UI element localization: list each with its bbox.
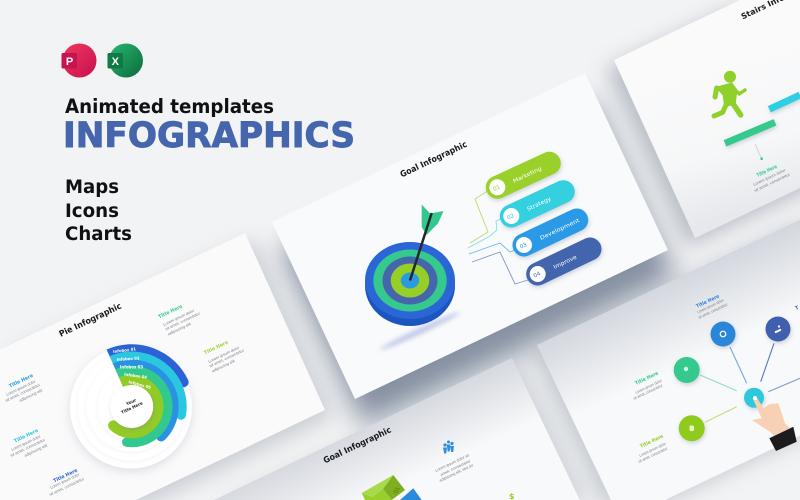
bar: green step: [725, 122, 775, 143]
label: lime title: [637, 433, 669, 464]
connector lines: [700, 343, 800, 422]
label: bottom blue title: Title Here: [53, 467, 79, 484]
pill: development: Development: [539, 218, 582, 242]
icon: powerpoint: [62, 44, 96, 78]
heading: pie title: Pie Infographic: [58, 302, 123, 340]
label: lime title: [203, 339, 245, 373]
icon: lime tool: [679, 415, 705, 441]
label: stairs title here: [752, 164, 791, 193]
label: green title: Title Here: [634, 370, 660, 387]
text: lorem: amet, consectetur: [439, 458, 472, 477]
ring: infobox 02: [112, 357, 186, 420]
ring: infobox 03: [115, 365, 174, 442]
label: left cyan title: Title Here: [13, 428, 40, 445]
panel: stairs slide: [614, 0, 800, 238]
ring labels: Infobox 03: [120, 364, 143, 370]
label: left blue title: [4, 373, 44, 403]
label: stairs title here: Lorem ipsum dolor: [752, 167, 787, 187]
ring labels: [113, 346, 152, 390]
label: left blue title: adipiscing elit: [18, 387, 44, 403]
heading: animated templates: Animated templates: [65, 95, 274, 118]
list: features: Charts: [65, 224, 132, 245]
label: green title: Title Here: [158, 303, 184, 320]
ring: infobox 05: [108, 380, 158, 433]
label: bottom blue title: [48, 467, 85, 497]
heading: bottom goal title: Goal Infographic: [322, 425, 393, 466]
centre label: Your: [124, 397, 138, 407]
label: bottom blue title: Lorem ipsum dolor: [49, 471, 81, 490]
label: left blue title: Lorem ipsum dolor: [5, 378, 37, 397]
label: lime title: Lorem ipsum dolor: [207, 345, 241, 364]
label: lime title: Lorem ipsum dolor: [638, 441, 667, 458]
icon: people: [443, 440, 454, 454]
text: lorem: [434, 452, 475, 483]
heading: goal title: Goal Infographic: [399, 140, 469, 180]
icon: blue clock: [710, 322, 736, 346]
icon: centre button: [744, 388, 764, 408]
label: blue title: Title Here: [695, 293, 721, 310]
label: lime title: adipiscing elit: [211, 358, 236, 373]
label: green title: adipiscing elit: [167, 321, 192, 336]
pill: strategy: [503, 192, 563, 224]
label: left blue title: sit amet, consectetur: [4, 382, 41, 403]
icon: arrow: [410, 204, 444, 280]
ring labels: Infobox 04: [124, 372, 148, 380]
label: stairs title here: sit amet, consectetur: [753, 171, 791, 193]
panel: bottom goal slide: [214, 358, 580, 500]
label: blue title: sit amet, consectetur: [697, 301, 729, 320]
label: blue title: [695, 293, 729, 320]
icon: powerpoint: P: [66, 56, 73, 68]
centre circle: [110, 385, 153, 428]
label: bottom blue title: sit amet, consectetur: [48, 476, 85, 497]
label: left cyan title: adipiscing elit: [23, 442, 49, 458]
icon: target: [365, 204, 461, 352]
text: lorem: adipiscing elit, sed do: [438, 462, 475, 483]
label: blue title: Lorem ipsum dolor: [696, 297, 725, 314]
pill: marketing: Marketing: [512, 166, 543, 185]
icon: stacked cubes: [362, 475, 422, 500]
panel: main goal slide: [272, 73, 668, 399]
label: green title: [158, 303, 201, 336]
icon: indigo hand: [766, 316, 790, 342]
label: lime title: Title Here: [203, 339, 230, 356]
connector: [755, 144, 763, 160]
ring: infobox 01: [109, 349, 189, 387]
label: green title: Lorem ipsum dolor: [162, 308, 196, 327]
ring: infobox 04: [117, 370, 168, 447]
pill: marketing: 01: [492, 184, 501, 193]
pill: development: 03: [519, 242, 528, 251]
ring labels: Infobox 01: [113, 346, 136, 354]
icon: excel: X: [112, 56, 120, 68]
list: features: Icons: [65, 201, 119, 222]
icon: green bulb: [674, 357, 700, 383]
ring labels: Infobox 02: [116, 355, 140, 362]
label: left cyan title: Lorem ipsum dolor: [10, 433, 42, 452]
label: left cyan title: sit amet, consectetur: [9, 437, 46, 458]
label: green title: Lorem ipsum dolor: [634, 378, 663, 395]
label: lime title: sit amet, consectetur: [637, 445, 669, 464]
label: lime title: Title Here: [639, 433, 665, 450]
label: green title: [632, 370, 664, 401]
heading: infographics: INFOGRAPHICS: [63, 116, 355, 156]
label: green title: sit amet, consectetur: [164, 310, 201, 331]
pill: improve: 04: [533, 271, 542, 280]
pill: marketing: [489, 163, 549, 195]
label: clipped title: T: [794, 305, 800, 312]
ring labels: Infobox 05: [128, 379, 152, 390]
pill: improve: Improve: [553, 254, 579, 271]
icon: stacked cubes: 01: [393, 486, 402, 495]
label: left cyan title: [9, 428, 49, 458]
pill: strategy: Strategy: [526, 196, 553, 213]
label: green title: sit amet, consectetur: [632, 382, 664, 401]
panel: hand pointer slide: [537, 220, 800, 500]
icon: excel: [108, 44, 143, 78]
connector lines: [468, 190, 528, 284]
text: lorem: Lorem ipsum dolor sit: [434, 452, 471, 473]
list: features: [65, 177, 132, 245]
icon: runner: [714, 71, 745, 116]
pill: improve: [530, 249, 590, 282]
list: features: Maps: [65, 177, 119, 198]
centre label: Title Here: [120, 400, 144, 415]
pill: development: [516, 218, 582, 253]
label: lime title: sit amet, consectetur: [208, 347, 245, 368]
chart: radial pie: [70, 346, 192, 468]
pill: strategy: 02: [506, 213, 515, 222]
icon: hand: [752, 396, 797, 451]
label: left blue title: Title Here: [8, 373, 35, 390]
panel: pie slide: [0, 233, 325, 500]
bar: cyan step: [769, 95, 800, 109]
label: stairs title here: Title Here: [756, 164, 779, 179]
